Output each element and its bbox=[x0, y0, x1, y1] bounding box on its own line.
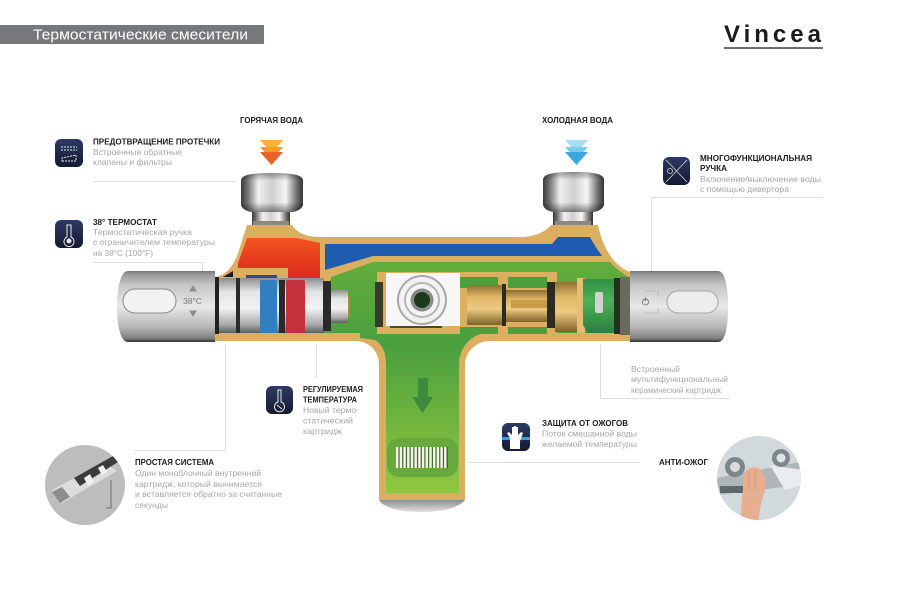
callout: simple system: ПРОСТАЯ СИСТЕМА bbox=[135, 457, 214, 467]
callout: adjustable temperature: Новый термо- bbox=[303, 405, 359, 415]
icon: cold water arrow bbox=[565, 140, 588, 165]
callout: burn protection: ЗАЩИТА ОТ ОЖОГОВ bbox=[542, 418, 628, 428]
logo: Vincea: Vincea bbox=[724, 21, 822, 48]
callout: ceramic cartridge: мультифункциональный bbox=[631, 374, 728, 384]
brass cartridge bbox=[467, 282, 577, 332]
icon: hot water arrow bbox=[260, 140, 283, 165]
housing base cap bbox=[379, 500, 465, 512]
callout: 38 degree thermostat: 38° ТЕРМОСТАТ bbox=[93, 217, 158, 227]
cold water channel bbox=[325, 237, 602, 270]
right function handle bbox=[630, 271, 728, 342]
callout: adjustable temperature: статический bbox=[303, 416, 353, 426]
brass housing bbox=[214, 225, 630, 500]
left thermostatic handle: 38°C bbox=[183, 296, 202, 306]
leader lines bbox=[94, 182, 823, 462]
lower brass strip bbox=[215, 333, 360, 340]
green windows bbox=[460, 277, 547, 334]
right connector nut bbox=[543, 172, 604, 228]
callout: adjustable temperature bbox=[266, 384, 363, 436]
callout: ceramic cartridge bbox=[631, 364, 728, 395]
callout: simple system: секунды bbox=[135, 500, 168, 510]
flow arrow bbox=[412, 378, 433, 413]
callout: burn protection: Поток смешанной воды bbox=[542, 428, 637, 438]
icon: handle functions bbox=[663, 157, 690, 185]
header bar with title: Термостатические смесители bbox=[33, 26, 248, 44]
callout: simple system: Один моноблочный внутренний bbox=[135, 468, 261, 478]
callout: adjustable temperature: ТЕМПЕРАТУРА bbox=[303, 394, 357, 404]
infographic canvas bbox=[0, 24, 823, 525]
callout: simple system: картридж, который вынимается bbox=[135, 479, 262, 489]
callout: burn protection: желаемой температуры bbox=[542, 439, 637, 449]
callout: 38 degree thermostat: Термостатическая ручка bbox=[93, 227, 192, 237]
left thermostatic handle bbox=[117, 271, 215, 342]
callout: adjustable temperature: картридж bbox=[303, 426, 342, 436]
outlet grate bbox=[387, 438, 458, 477]
callout: burn protection bbox=[502, 418, 637, 451]
left cartridge bbox=[214, 275, 350, 334]
photo: cartridge removal bbox=[45, 445, 125, 525]
hot water channel bbox=[238, 238, 320, 280]
label: hot water: ГОРЯЧАЯ ВОДА bbox=[240, 115, 303, 125]
callout: leak prevention: Встроенные обратные bbox=[93, 147, 182, 157]
callout: multifunction handle: РУЧКА bbox=[700, 163, 727, 173]
callout: multifunction handle: Включение/выключение воды bbox=[700, 174, 821, 184]
white valve window bbox=[375, 273, 460, 328]
callout: 38 degree thermostat: с ограничителем температуры bbox=[93, 237, 215, 247]
callout: multifunction handle bbox=[663, 153, 821, 194]
callout: leak prevention: ПРЕДОТВРАЩЕНИЕ ПРОТЕЧКИ bbox=[93, 136, 220, 146]
mixed water channel bbox=[323, 262, 630, 493]
icon: adjustable thermometer bbox=[266, 386, 293, 414]
callout: 38 degree thermostat bbox=[55, 217, 215, 258]
left connector nut bbox=[241, 173, 303, 228]
callout: simple system: и вставляется обратно за считанные bbox=[135, 489, 282, 499]
ceramic green cartridge bbox=[577, 277, 631, 335]
icon: hand bbox=[502, 423, 530, 451]
callout: leak prevention bbox=[55, 136, 220, 167]
dark wedge at handle collar bbox=[223, 271, 233, 277]
icon: thermometer bbox=[55, 220, 83, 248]
callout: multifunction handle: МНОГОФУНКЦИОНАЛЬНАЯ bbox=[700, 153, 812, 163]
mixer body section bbox=[214, 225, 631, 512]
header bar with title bbox=[0, 25, 264, 44]
photo: hand on faucet bbox=[717, 436, 803, 520]
callout: 38 degree thermostat: на 38°C (100°F) bbox=[93, 248, 153, 258]
callout: multifunction handle: с помощью дивертора bbox=[700, 184, 789, 194]
callout: simple system bbox=[135, 457, 282, 510]
callout: leak prevention: клапаны и фильтры bbox=[93, 157, 172, 167]
inner brass frame bbox=[377, 272, 557, 334]
callout: adjustable temperature: РЕГУЛИРУЕМАЯ bbox=[303, 384, 363, 394]
callout: ceramic cartridge: Встроенный bbox=[631, 364, 680, 374]
label: anti-burn: АНТИ-ОЖОГ bbox=[659, 457, 708, 467]
icon: filter bbox=[55, 139, 83, 167]
label: cold water: ХОЛОДНАЯ ВОДА bbox=[542, 115, 613, 125]
callout: ceramic cartridge: керамический картридж bbox=[631, 385, 721, 395]
